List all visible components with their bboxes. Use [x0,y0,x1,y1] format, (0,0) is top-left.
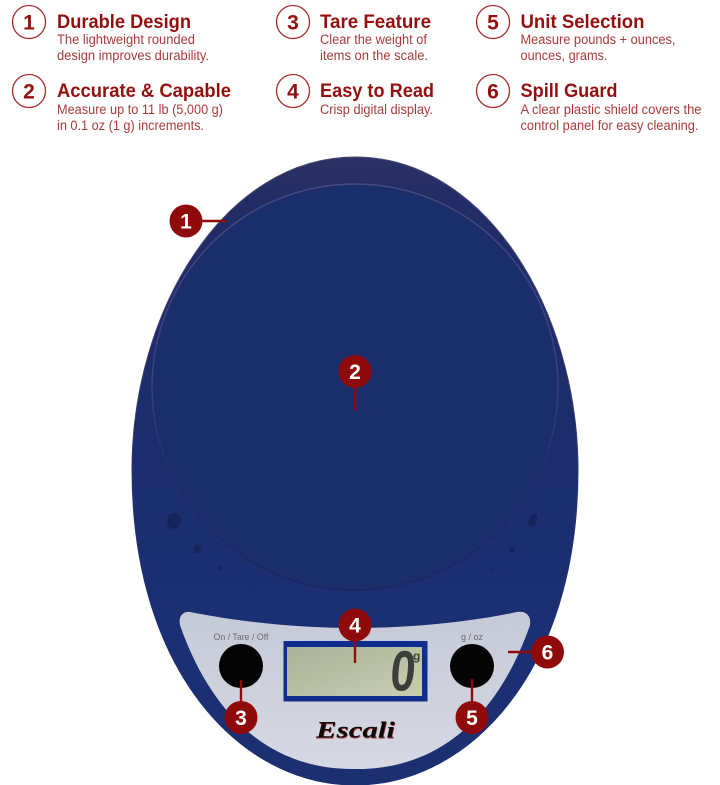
Escali logo: Escali [315,718,396,744]
weighing platform [152,184,558,590]
feature 6: spill guard: control panel for easy cleaning. [520,118,698,133]
feature 5: unit selection: Measure pounds + ounces, [520,32,676,47]
callout markers [170,204,564,734]
marker 1 [170,204,226,238]
feature 6: spill guard: A clear plastic shield covers the [520,102,702,117]
display reading: 0 [388,640,418,703]
g / oz label: g / oz [461,632,484,642]
feature 5: unit selection: Unit Selection [520,11,644,33]
marker 1: 1 [180,210,192,234]
Escali logo: Escali [315,718,396,742]
Escali logo [315,718,396,744]
feature 3: tare feature: Clear the weight of [320,32,427,47]
marker 4: 4 [349,614,361,638]
marker 2: 2 [349,361,361,384]
feature 1: durable design: Durable Design [57,11,191,33]
scale body [132,157,578,785]
feature 4: easy to read: 4 [287,80,299,104]
feature 3: tare feature [276,6,431,63]
feature 6: spill guard [476,74,702,133]
feature 3: tare feature: 3 [287,12,299,34]
marker 6: 6 [542,642,553,664]
marker 5: 5 [466,707,478,730]
marker 4 [338,608,372,663]
marker 2 [338,355,372,411]
feature 4: easy to read [276,74,434,117]
feature list [12,6,702,133]
feature 5: unit selection: ounces, grams. [520,48,608,63]
on / tare / off label: On / Tare / Off [214,632,269,642]
marker 5 [456,679,488,734]
LCD display [284,640,428,703]
feature 1: durable design: 1 [23,12,35,34]
feature 2: accurate and capable: Measure up to 11 lb (5,000 g) [57,102,223,117]
left vent holes [167,513,221,570]
kitchen scale illustration [132,157,578,785]
control panel [180,612,530,769]
gram unit: g [413,649,420,663]
feature 6: spill guard: Spill Guard [520,80,618,102]
feature 6: spill guard: 6 [487,80,499,104]
feature 2: accurate and capable [12,74,231,133]
marker 6 [508,636,564,668]
marker 3: 3 [235,707,247,730]
feature 1: durable design [12,6,209,63]
feature 4: easy to read: Easy to Read [320,80,434,102]
feature 3: tare feature: Tare Feature [320,11,431,33]
feature 3: tare feature: items on the scale. [320,48,428,63]
right vent holes [490,512,539,571]
feature 2: accurate and capable: in 0.1 oz (1 g) increments. [57,118,204,133]
feature 2: accurate and capable: 2 [23,80,35,104]
feature 4: easy to read: Crisp digital display. [320,102,433,117]
feature 5: unit selection: 5 [487,12,499,34]
unit button [450,644,494,688]
on / tare / off button [219,644,263,688]
feature 5: unit selection [476,6,676,63]
feature 1: durable design: The lightweight rounded [57,32,195,47]
marker 3 [224,680,258,734]
feature 1: durable design: design improves durability. [57,48,209,63]
feature 2: accurate and capable: Accurate & Capable [57,80,231,102]
